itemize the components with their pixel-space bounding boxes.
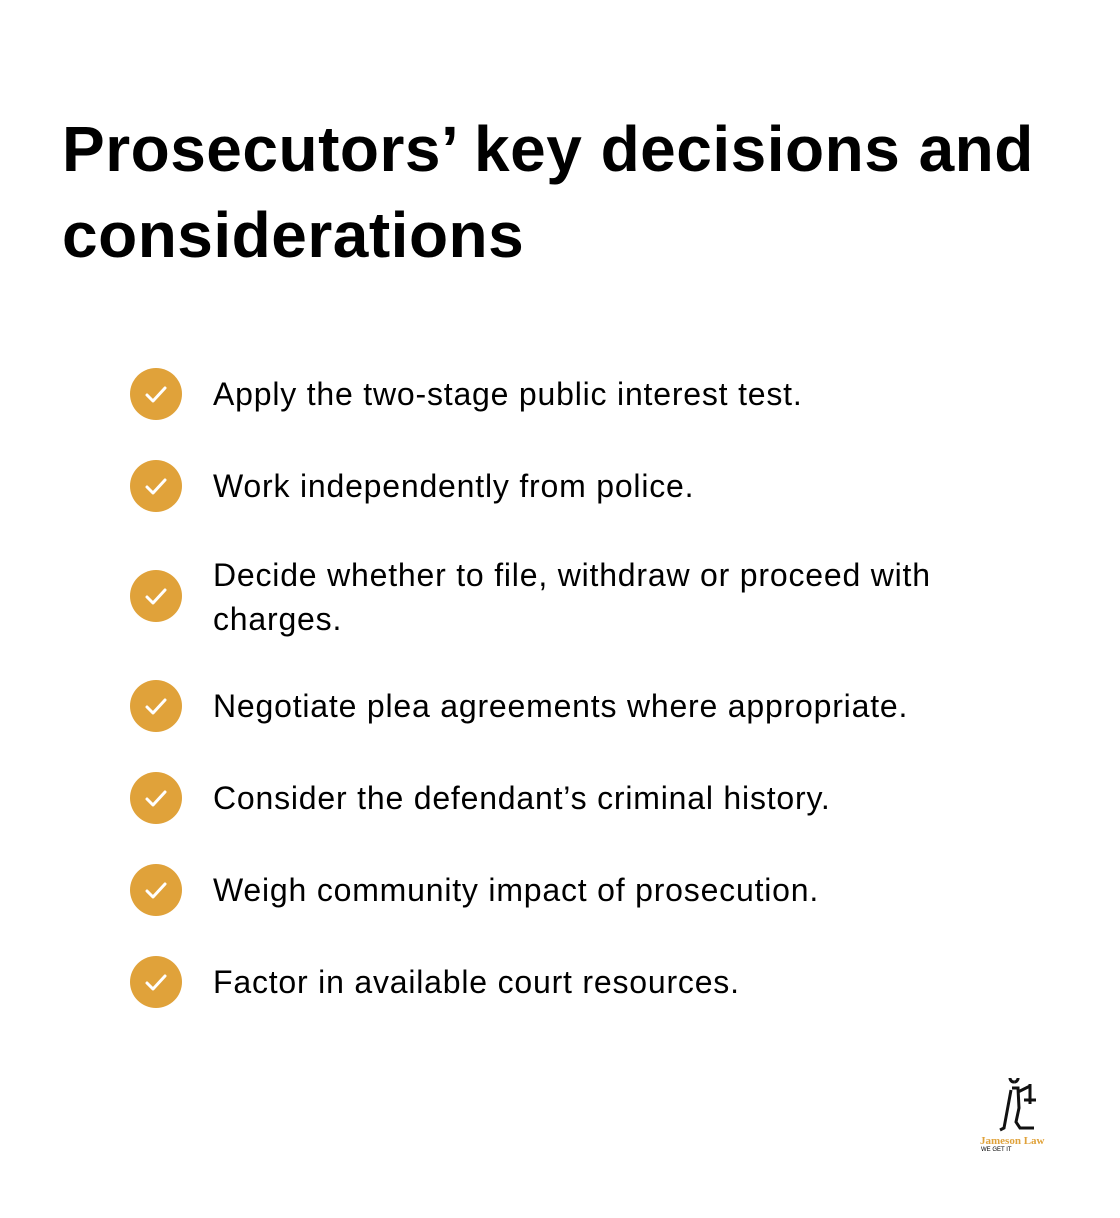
text: Decide whether to file, withdraw or proceed with	[213, 557, 931, 593]
text: Weigh community impact of prosecution.	[213, 872, 819, 908]
text: Factor in available court resources.	[213, 964, 740, 1000]
logo: WE GET IT	[981, 1147, 1012, 1153]
logo	[980, 1078, 1044, 1153]
item 3	[130, 557, 931, 637]
item 7	[130, 956, 740, 1008]
text: Work independently from police.	[213, 468, 694, 504]
text: Consider the defendant’s criminal history.	[213, 780, 831, 816]
item 4	[130, 680, 908, 732]
title	[62, 113, 1034, 271]
logo: Jameson Law	[980, 1135, 1044, 1147]
item 5	[130, 772, 831, 824]
item 6	[130, 864, 819, 916]
item 2	[130, 460, 694, 512]
title: Prosecutors’ key decisions and	[62, 113, 1034, 185]
item 1	[130, 368, 803, 420]
text: charges.	[213, 601, 342, 637]
title: considerations	[62, 199, 524, 271]
text: Apply the two-stage public interest test.	[213, 376, 803, 412]
text: Negotiate plea agreements where appropriate.	[213, 688, 908, 724]
